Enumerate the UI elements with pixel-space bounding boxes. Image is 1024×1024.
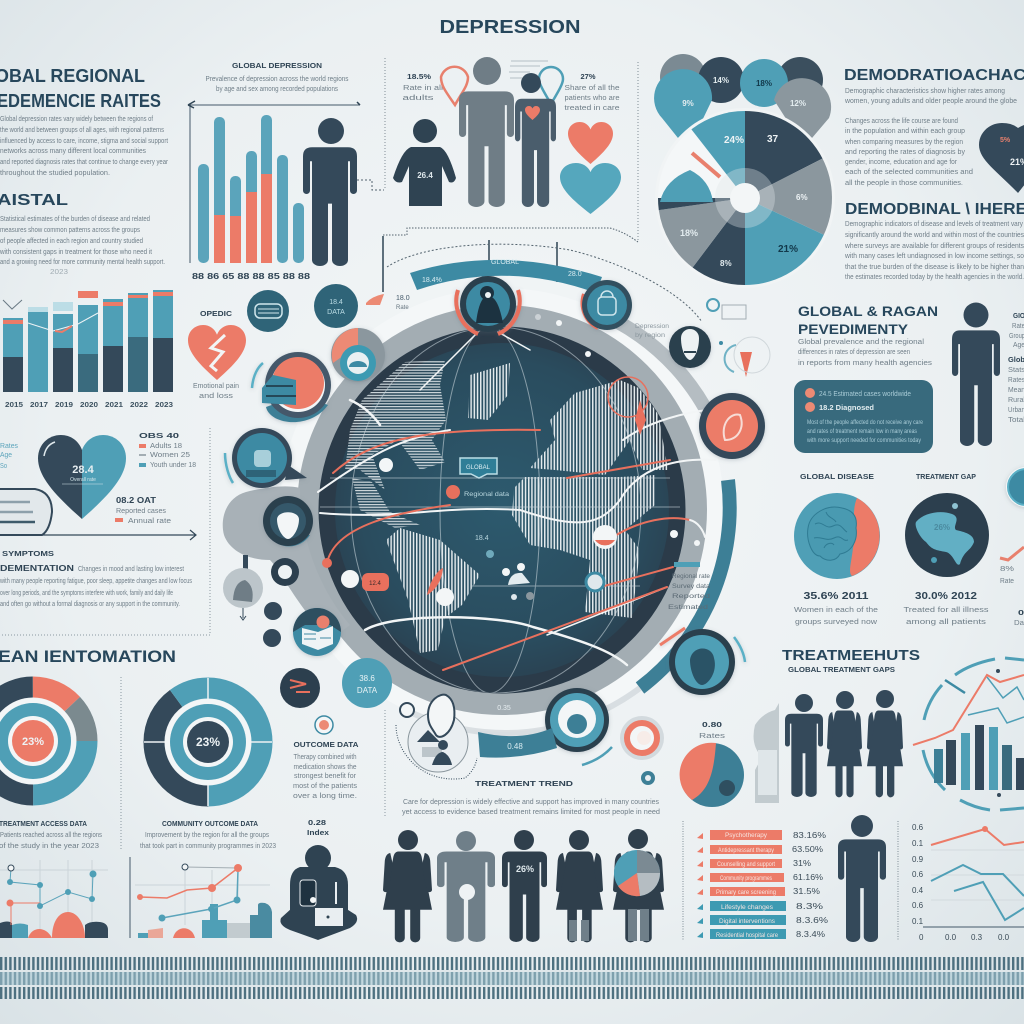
satellite: teal left with figure bbox=[225, 428, 307, 488]
panel: heart split chart: Youth under 18 bbox=[150, 462, 196, 469]
icon: world circle: 26% bbox=[934, 523, 950, 532]
table: ranked bars: Counselling and support bbox=[717, 862, 775, 868]
satellite: bottom right teal bbox=[660, 628, 745, 695]
side text right of globe bbox=[668, 562, 711, 611]
body text: treatment section: yet access to evidence based treatment remains limited for most people in need bbox=[402, 809, 660, 816]
body text: donut notes: strongest benefit for bbox=[294, 773, 357, 780]
panel: dementation text bbox=[0, 551, 192, 608]
grid lines bbox=[320, 327, 680, 693]
icon: coral check bbox=[1000, 547, 1024, 560]
labels: bottom left charts: TREATMENT ACCESS DATA bbox=[0, 821, 87, 828]
icon: broken heart: OPEDIC bbox=[200, 311, 232, 318]
panel: treatments bbox=[680, 647, 1024, 810]
panel: chart lower left: 2022 bbox=[130, 402, 148, 409]
satellite: top right bag bbox=[582, 280, 632, 330]
panel: chart lower left bbox=[3, 290, 173, 409]
labels: right edge: 0 bbox=[1018, 610, 1024, 617]
satellite: coral ring bbox=[620, 716, 664, 760]
body text: far right bbox=[1008, 313, 1024, 424]
heading: demographics: DEMODRATIOACHAC bbox=[844, 67, 1024, 84]
panel: heart split chart: 08.2 OAT bbox=[116, 496, 156, 505]
panel: heart split chart: Adults 18 bbox=[150, 443, 182, 450]
icon: man gray bbox=[437, 831, 495, 942]
pie chart: demographics: 37 bbox=[767, 134, 779, 145]
title: DEPRESSION bbox=[440, 17, 580, 37]
body text: treatment section bbox=[402, 781, 660, 816]
small stat: coral bars: 18.0 bbox=[396, 295, 410, 302]
body text: rates bbox=[0, 116, 169, 177]
icon: brain circle bbox=[794, 493, 880, 579]
body text: prevalence: differences in rates of depression are seen bbox=[798, 349, 910, 356]
line chart: bottom right: 0.3 bbox=[971, 933, 983, 942]
body text: under circles: Women in each of the bbox=[794, 607, 878, 614]
icon: couple group: 26.4 bbox=[417, 171, 433, 180]
panel: heart split chart: Age bbox=[0, 452, 12, 459]
panel: heart split chart bbox=[0, 433, 196, 525]
body text: rates: throughout the studied population. bbox=[0, 170, 110, 177]
callout: dark teal box bbox=[794, 380, 933, 453]
line chart: bottom right: 0.6 bbox=[912, 901, 924, 910]
body text: under circles: 30.0% 2012 bbox=[915, 591, 977, 602]
satellite: top woman bbox=[456, 276, 520, 334]
icon: broken heart: Emotional pain bbox=[193, 383, 239, 390]
body text: under circles: among all patients bbox=[906, 619, 987, 626]
callout: dark teal box: Most of the people affected do not receive any care bbox=[807, 419, 923, 426]
line chart: bottom right: 0.1 bbox=[912, 839, 924, 848]
chart: donut right bbox=[144, 678, 272, 806]
labels: bottom left charts: COMMUNITY OUTCOME DATA bbox=[162, 821, 258, 828]
body text: donut notes: over a long time. bbox=[293, 793, 357, 800]
satellite: teal pill bbox=[314, 284, 358, 328]
label: pie stat: 0.80 bbox=[702, 722, 722, 729]
satellite: teal stat: 38.6 bbox=[359, 674, 375, 683]
heading: prevalence rates: EDEMENCIE RAITES bbox=[0, 91, 161, 111]
bottom teal tag: 0.48 bbox=[507, 742, 523, 751]
pie wedges bbox=[658, 111, 832, 285]
icon: woman dark bbox=[383, 830, 432, 942]
icon: world circle bbox=[905, 493, 989, 577]
globe markers: 18.4 bbox=[475, 535, 489, 542]
icon: gray person bbox=[459, 57, 514, 207]
side text right of globe: Reported bbox=[672, 594, 710, 600]
connector lines bbox=[357, 58, 702, 322]
body text: prevalence: Global prevalence and the regional bbox=[798, 339, 925, 346]
pie chart: demographics: 21% bbox=[778, 244, 798, 255]
body text: demographics intro: all the people in those communities. bbox=[845, 180, 963, 187]
body text: statistical: and a growing need for more community mental health support. bbox=[0, 259, 165, 266]
panel: speech bubble and arrow bbox=[0, 489, 196, 540]
line chart: bottom right: 0.9 bbox=[912, 855, 924, 864]
icon: coral heart bbox=[568, 122, 613, 164]
labels: bottom left charts bbox=[0, 820, 329, 850]
icon: dark heart: 5% bbox=[1000, 137, 1011, 144]
satellite: teal stat bbox=[342, 658, 392, 708]
chart: network left bbox=[0, 860, 108, 938]
icon: broken heart: and loss bbox=[199, 393, 234, 400]
bar chart: global rates: by age and sex among recorded populations bbox=[216, 86, 338, 93]
globe markers: Regional data bbox=[464, 492, 510, 498]
panel: heart split chart: Rates bbox=[0, 443, 18, 450]
body text: under circles: Treated for all illness bbox=[904, 607, 989, 614]
line chart: bottom right bbox=[912, 823, 1024, 942]
icon: woman dark two bbox=[556, 830, 603, 942]
panel: demographics text bbox=[844, 67, 1024, 281]
body text: under circles: groups surveyed now bbox=[795, 619, 878, 626]
group: row of people bbox=[383, 829, 664, 942]
body text: under circles bbox=[794, 591, 989, 626]
satellite: gray figure bbox=[223, 555, 263, 620]
satellite: bottom left icon bbox=[396, 695, 477, 779]
chart: donut right: 23% bbox=[196, 735, 220, 749]
chart: network right bbox=[130, 857, 272, 938]
satellite: dark teal left bbox=[247, 290, 289, 332]
body text: statistical: 2023 bbox=[50, 269, 68, 276]
panel: heart split chart: Annual rate bbox=[128, 518, 171, 525]
body text: treatment section: Care for depression is widely effective and support has improved in many countries bbox=[403, 799, 659, 806]
body text: demographics intro bbox=[844, 88, 1017, 187]
lower band bbox=[410, 688, 640, 733]
small stat: coral bars: Rate bbox=[396, 305, 409, 311]
body text: demographics intro: each of the selected communities and bbox=[845, 169, 973, 176]
icon: man dark bbox=[502, 830, 547, 942]
body text: statistical bbox=[0, 216, 165, 276]
land: central america bbox=[352, 478, 420, 528]
icon: small heart on figure bbox=[525, 106, 540, 120]
line chart: bottom right: 0.0 bbox=[945, 933, 957, 942]
satellite: small dot lower bbox=[263, 629, 281, 647]
panel: chart lower left: 2017 bbox=[30, 402, 48, 409]
land: north america bbox=[345, 360, 446, 490]
table: ranked bars: 8.3% bbox=[796, 902, 823, 911]
side text right of globe: Regional rate bbox=[672, 574, 711, 580]
table: ranked bars: Digital interventions bbox=[719, 919, 775, 925]
heading: prevalence: PEVEDIMENTY bbox=[798, 321, 909, 337]
body text: demographic index bbox=[844, 221, 1024, 281]
table: ranked bars: Antidepressant therapy bbox=[718, 848, 774, 854]
body text: demographics intro: Changes across the life course are found bbox=[845, 118, 958, 125]
body text: rates: networks across many different local communities bbox=[0, 148, 146, 155]
labels: right edge: 8% bbox=[1000, 566, 1014, 573]
top ribbon bbox=[410, 260, 602, 293]
panel: heart split chart: Reported cases bbox=[116, 508, 167, 515]
body text: donut notes: Therapy combined with bbox=[294, 754, 357, 761]
divider vertical bbox=[0, 428, 210, 635]
body text: donut notes: medication shows the bbox=[294, 764, 357, 771]
label: right stat: 27% bbox=[580, 74, 596, 81]
bottom ring label: 0.35 bbox=[497, 705, 511, 712]
icon: person right bbox=[952, 302, 1000, 446]
satellite: teal stat: DATA bbox=[357, 686, 378, 695]
body text: rates: the world and between groups of all ages, with regional patterns bbox=[0, 127, 164, 134]
panel: dementation text: Changes in mood and lasting low interest bbox=[78, 566, 184, 573]
label: right stat: patients who are bbox=[564, 95, 620, 102]
left gray blob bbox=[223, 486, 350, 640]
satellite: small dark dot bbox=[264, 602, 282, 620]
panel: heart split chart: Overall rate bbox=[70, 477, 96, 483]
table: ranked bars: Residential hospital care bbox=[716, 933, 779, 939]
body text: prevalence: in reports from many health agencies bbox=[798, 360, 933, 367]
land: eurasia bbox=[530, 380, 668, 475]
icon: partial teal ring bbox=[1006, 467, 1024, 507]
icon: teal arc under satellite bbox=[582, 747, 612, 765]
table: ranked bars: 31.5% bbox=[793, 887, 820, 896]
curves bbox=[318, 332, 715, 670]
labels: circle headings: GLOBAL DISEASE bbox=[800, 474, 874, 481]
chart: donut left bbox=[0, 677, 97, 805]
table: ranked bars: Lifestyle changes bbox=[721, 905, 773, 911]
side text right of globe: Survey data bbox=[672, 584, 711, 590]
globe markers: 12.4 bbox=[369, 581, 381, 587]
globe system: 28.0 bbox=[568, 271, 582, 278]
satellite: upper left teal bbox=[331, 328, 385, 382]
icon: person bottom right bbox=[838, 815, 886, 942]
heading: intervention: EAN IENTOMATION bbox=[0, 647, 176, 666]
group: row of people: 26% bbox=[516, 864, 534, 874]
icon: broken heart bbox=[188, 311, 246, 400]
heading: treatments: TREATMEEHUTS bbox=[782, 647, 920, 664]
top bubbles: 14% bbox=[713, 76, 729, 85]
label: right stat: Share of all the bbox=[564, 85, 620, 92]
icon: three people bbox=[785, 690, 903, 797]
body text: statistical: Statistical estimates of the burden of disease and related bbox=[0, 216, 150, 223]
globe bbox=[319, 327, 685, 693]
bottom teal tag bbox=[478, 728, 557, 758]
line chart: bottom right: 0.0 bbox=[998, 933, 1010, 942]
panel: chart lower left: 2020 bbox=[80, 402, 98, 409]
table: ranked bars: 8.3.6% bbox=[796, 916, 828, 925]
top bubbles: 9% bbox=[682, 99, 694, 108]
globe system: 18.4% bbox=[422, 277, 442, 284]
pie chart: demographics: 8% bbox=[720, 259, 732, 268]
labels: right edge: Rate bbox=[1000, 578, 1014, 585]
satellite: teal pill: 18.4 bbox=[329, 299, 343, 306]
body text: far right: Glob bbox=[1008, 357, 1024, 364]
barcode band bbox=[0, 957, 1024, 999]
icon: teal heart bbox=[560, 163, 621, 214]
body text: far right: Stats bbox=[1008, 367, 1024, 374]
label: small stat bbox=[402, 74, 444, 102]
line chart: bottom right: 0.4 bbox=[912, 886, 924, 895]
body text: demographics intro: women, young adults and older people around the globe bbox=[844, 98, 1017, 105]
callout: dark teal box: 24.5 Estimated cases worldwide bbox=[819, 391, 911, 398]
subheading: treatments: GLOBAL TREATMENT GAPS bbox=[788, 667, 895, 674]
icon: teal pin bbox=[539, 67, 563, 104]
satellite: coral right bbox=[699, 393, 765, 459]
icon: small coral ring bbox=[315, 716, 333, 734]
satellite: bottom center bbox=[545, 688, 609, 752]
icon: person in shirt bbox=[393, 119, 456, 206]
label top right of globe: by region bbox=[635, 333, 665, 339]
divider dotted short bbox=[384, 710, 386, 817]
top bubbles: 18% bbox=[756, 79, 772, 88]
panel: chart lower left: 2019 bbox=[55, 402, 73, 409]
globe land and grid bbox=[320, 327, 680, 693]
land: greenland bbox=[468, 363, 510, 420]
label: right stat: treated in care bbox=[564, 105, 620, 112]
top bubbles bbox=[654, 54, 831, 138]
icon: meditating person bbox=[280, 845, 357, 940]
label: small stat: adults bbox=[402, 95, 434, 102]
table: ranked bars: 61.16% bbox=[793, 873, 823, 882]
panel: dementation text: over long periods, and the symptoms interfere with work, family and daily life bbox=[0, 590, 173, 597]
body text: donut notes: most of the patients bbox=[293, 783, 358, 790]
heading: demographic index: DEMODBINAL \ IHERE bbox=[845, 201, 1024, 218]
table: ranked bars: 31% bbox=[793, 859, 811, 868]
labels: bottom left charts: Index bbox=[307, 830, 329, 837]
pie chart: demographics bbox=[654, 54, 835, 288]
satellite: coral left bbox=[252, 352, 331, 422]
pie chart: demographics: 6% bbox=[796, 193, 808, 202]
body text: rates: influenced by access to care, income, stigma and social support bbox=[0, 138, 168, 145]
body text: demographics intro: when comparing measures by the region bbox=[844, 139, 963, 146]
bar chart: global rates bbox=[188, 63, 360, 281]
icon: small teal node bbox=[641, 771, 655, 785]
globe center label: GLOBAL bbox=[466, 465, 491, 471]
line chart: bottom right: 0 bbox=[919, 933, 924, 942]
line chart: bottom right: 0.6 bbox=[912, 823, 924, 832]
chart: donut left: 23% bbox=[22, 736, 44, 748]
icon: woman with pie bbox=[613, 829, 664, 942]
label: small stat: Rate in all bbox=[403, 85, 444, 92]
icon: person beside chart bbox=[303, 118, 357, 266]
bar chart: global rates: Prevalence of depression across the world regions bbox=[206, 76, 349, 83]
callout: dark teal box: 18.2 Diagnosed bbox=[819, 405, 874, 412]
label top right of globe bbox=[635, 324, 669, 339]
panel: heart split chart: OBS 40 bbox=[139, 433, 179, 440]
body text: treatment section: TREATMENT TREND bbox=[475, 781, 573, 788]
divider dotted donut bbox=[120, 677, 122, 850]
body text: statistical: of people affected in each region and country studied bbox=[0, 238, 143, 245]
icon: dark person with heart bbox=[515, 73, 556, 207]
panel: regional rates text bbox=[0, 66, 169, 276]
table: ranked bars: 8.3.4% bbox=[796, 930, 825, 939]
gray outer band upper right bbox=[618, 322, 716, 430]
icon: small top right markers bbox=[707, 299, 770, 377]
icon: building bbox=[754, 703, 779, 803]
dotted dividers bbox=[683, 821, 898, 940]
satellite: small dark bbox=[271, 558, 299, 586]
panel: global and regional prevalence bbox=[794, 302, 1024, 453]
body text: demographics intro: in the population and within each group bbox=[845, 128, 965, 135]
globe center label bbox=[460, 458, 497, 478]
labels: bottom left charts: of the study in the year 2023 bbox=[0, 843, 99, 850]
body text: rates: Global depression rates vary widely between the regions of bbox=[0, 116, 153, 123]
globe system: GLOBAL bbox=[491, 259, 519, 266]
side text right of globe: Estimated bbox=[668, 605, 708, 611]
labels: circle headings bbox=[800, 474, 976, 481]
satellite: paper teal bbox=[293, 608, 341, 656]
body text: far right: Total bbox=[1008, 417, 1024, 424]
labels: right edge: Da bbox=[1014, 620, 1024, 627]
icon: coral pin bbox=[441, 67, 468, 105]
panel: heart split chart: So bbox=[0, 463, 7, 470]
panel: dementation text: with many people reporting fatigue, poor sleep, appetite changes and low focus bbox=[0, 578, 192, 585]
body text: prevalence bbox=[798, 339, 933, 367]
satellite circles bbox=[223, 276, 770, 817]
pie chart: demographics: 18% bbox=[680, 228, 698, 238]
labels: bottom left charts: 0.28 bbox=[308, 820, 326, 827]
callout: dark teal box: and rates of treatment remain low in many areas bbox=[807, 428, 918, 435]
panel: heart split chart: Women 25 bbox=[150, 452, 190, 459]
labels: bottom left charts: that took part in community programmes in 2023 bbox=[140, 843, 276, 850]
body text: demographics intro: gender, income, education and age for bbox=[845, 159, 958, 166]
labels: right edge bbox=[1000, 566, 1024, 627]
icon: faint lines bbox=[509, 61, 548, 78]
table: ranked bars: Primary care screening bbox=[716, 890, 776, 896]
satellite: coral dark bbox=[280, 668, 320, 708]
land: africa and east bbox=[512, 475, 655, 618]
body text: under circles: 35.6% 2011 bbox=[804, 591, 869, 602]
icon: white circle on figure bbox=[459, 884, 475, 900]
body text: donut notes bbox=[293, 716, 358, 800]
top bubbles: 12% bbox=[790, 99, 806, 108]
gray ring bbox=[309, 317, 695, 703]
body text: rates: and reported diagnosis rates that continue to change every year bbox=[0, 159, 169, 166]
label: small stat: 18.5% bbox=[407, 74, 432, 81]
table: ranked bars bbox=[697, 830, 828, 939]
body text: statistical: with consistent gaps in treatment for those who need it bbox=[0, 249, 152, 256]
panel: dementation text: and often go without a formal diagnosis or any support in the community. bbox=[0, 601, 180, 608]
pie chart: treatment bbox=[680, 743, 744, 807]
land: south america bbox=[386, 528, 480, 653]
bar chart: global rates: GLOBAL DEPRESSION bbox=[232, 63, 322, 70]
panel: dementation text: SYMPTOMS bbox=[2, 551, 54, 558]
labels: bottom left charts: Patients reached across all the regions bbox=[0, 832, 102, 839]
callout: dark teal box: with more support needed for communities today bbox=[806, 437, 922, 444]
heading: global regional: GLOBAL & RAGAN bbox=[798, 303, 938, 319]
panel: chart lower left: 2015 bbox=[5, 402, 23, 409]
label top right of globe: Depression bbox=[635, 324, 669, 330]
icon: dark heart bbox=[979, 123, 1024, 193]
panel: heart split chart: 28.4 bbox=[72, 464, 95, 476]
satellite: left face bbox=[263, 496, 313, 546]
small stat: coral bars bbox=[366, 294, 410, 311]
globe markers bbox=[322, 314, 700, 606]
label: right stat bbox=[564, 74, 620, 112]
body text: statistical: measures show common patterns across the groups bbox=[0, 227, 140, 234]
panel: brain and map circles bbox=[794, 467, 1024, 627]
icon: couple group bbox=[393, 57, 621, 214]
body text: demographics intro: Demographic characteristics show higher rates among bbox=[845, 88, 1005, 95]
labels: circle headings: TREATMENT GAP bbox=[916, 474, 976, 481]
panel: chart lower left: 2021 bbox=[105, 402, 123, 409]
pie chart: demographics: 24% bbox=[724, 135, 744, 146]
label: pie stat bbox=[699, 722, 726, 740]
panel: chart lower left: 2023 bbox=[155, 402, 173, 409]
teal arc bbox=[640, 480, 730, 688]
body text: demographics intro: and reporting the rates of diagnosis by bbox=[845, 149, 966, 156]
panel: dementation text: DEMENTATION bbox=[0, 564, 74, 573]
bar chart: global rates: 88 86 65 88 88 85 88 88 bbox=[192, 272, 311, 281]
table: ranked bars: 63.50% bbox=[792, 845, 823, 854]
labels: bottom left charts: Improvement by the region for all the groups bbox=[145, 832, 269, 839]
icon: small pie on figure bbox=[614, 850, 660, 896]
globe system bbox=[223, 259, 730, 733]
body text: donut notes: OUTCOME DATA bbox=[294, 742, 358, 749]
line chart: bottom right: 0.6 bbox=[912, 870, 924, 879]
outer white ring bbox=[280, 288, 724, 732]
label: pie stat: Rates bbox=[699, 733, 726, 740]
line chart: bottom right: 0.1 bbox=[912, 917, 924, 926]
table: ranked bars: Community programmes bbox=[720, 876, 772, 882]
table: ranked bars: 83.16% bbox=[793, 831, 826, 840]
satellite: teal pill: DATA bbox=[327, 309, 345, 316]
table: ranked bars: Psychotherapy bbox=[725, 833, 767, 839]
satellite: upper right face bbox=[669, 326, 711, 368]
chart: ring chart far right bbox=[913, 658, 1024, 810]
